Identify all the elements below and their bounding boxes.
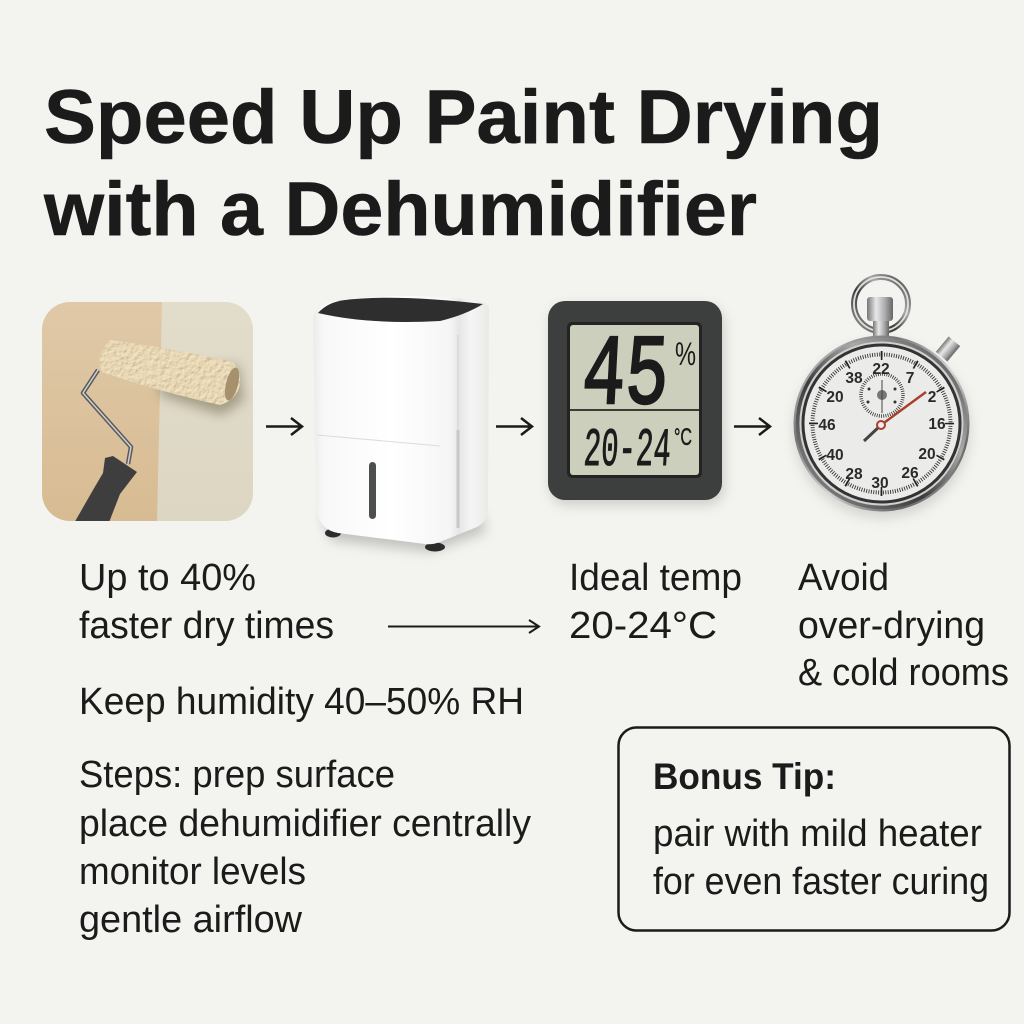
bonus tip body: pair with mild heater <box>653 813 982 855</box>
arrow 2 <box>496 418 532 435</box>
steps list <box>79 754 531 941</box>
bonus tip body: for even faster curing <box>653 861 989 903</box>
hygrometer reading: degrees celsius: °C <box>674 424 692 451</box>
stopwatch dial numbers: 22 <box>872 361 890 378</box>
caption: faster dry times: faster dry times <box>79 605 334 647</box>
stopwatch dial numbers <box>818 361 946 492</box>
stopwatch dial numbers: 28 <box>845 466 863 483</box>
caption: faster dry times: Up to 40% <box>79 557 256 599</box>
bonus tip heading: Bonus Tip: <box>653 756 836 797</box>
caption: humidity target: Keep humidity 40–50% RH <box>79 681 524 723</box>
hygrometer reading: temperature: 20-24 <box>582 421 672 482</box>
caption: avoid: & cold rooms <box>798 652 1009 694</box>
icon: stopwatch <box>794 277 970 518</box>
arrow 3 <box>734 418 770 435</box>
steps list: place dehumidifier centrally <box>79 803 531 845</box>
title <box>43 75 883 252</box>
icon: paint roller on half-painted wall <box>42 302 253 525</box>
title: Speed Up Paint Drying <box>44 75 883 160</box>
caption: ideal temperature: 20-24°C <box>569 605 717 647</box>
hygrometer reading: humidity: 45 <box>579 321 671 434</box>
caption: avoid <box>798 557 1009 694</box>
icon: dehumidifier <box>313 296 489 552</box>
caption: ideal temperature <box>569 557 742 647</box>
caption: ideal temperature: Ideal temp <box>569 557 742 599</box>
callout: bonus tip <box>618 728 1010 930</box>
steps list: monitor levels <box>79 851 306 893</box>
stopwatch dial numbers: 16 <box>928 416 946 433</box>
stopwatch dial numbers: 38 <box>845 370 863 387</box>
stopwatch dial numbers: 26 <box>901 465 919 482</box>
stopwatch dial numbers: 20 <box>826 389 844 406</box>
bonus tip body <box>653 813 989 903</box>
caption: avoid: Avoid <box>798 557 889 599</box>
stopwatch dial numbers: 46 <box>818 417 836 434</box>
icon: digital hygrometer <box>548 301 724 505</box>
caption: faster dry times <box>79 557 334 647</box>
title: with a Dehumidifier <box>43 167 757 252</box>
arrow: long connector <box>388 620 539 633</box>
steps list: gentle airflow <box>79 899 303 941</box>
arrow 1 <box>266 418 302 435</box>
caption: avoid: over-drying <box>798 605 985 647</box>
stopwatch dial numbers: 30 <box>871 475 889 492</box>
stopwatch dial numbers: 20 <box>918 446 936 463</box>
stopwatch dial numbers: 2 <box>928 389 936 406</box>
hygrometer reading: percent: % <box>675 336 696 372</box>
steps list: Steps: prep surface <box>79 754 395 796</box>
stopwatch dial numbers: 40 <box>826 447 844 464</box>
stopwatch dial numbers: 7 <box>906 370 914 387</box>
